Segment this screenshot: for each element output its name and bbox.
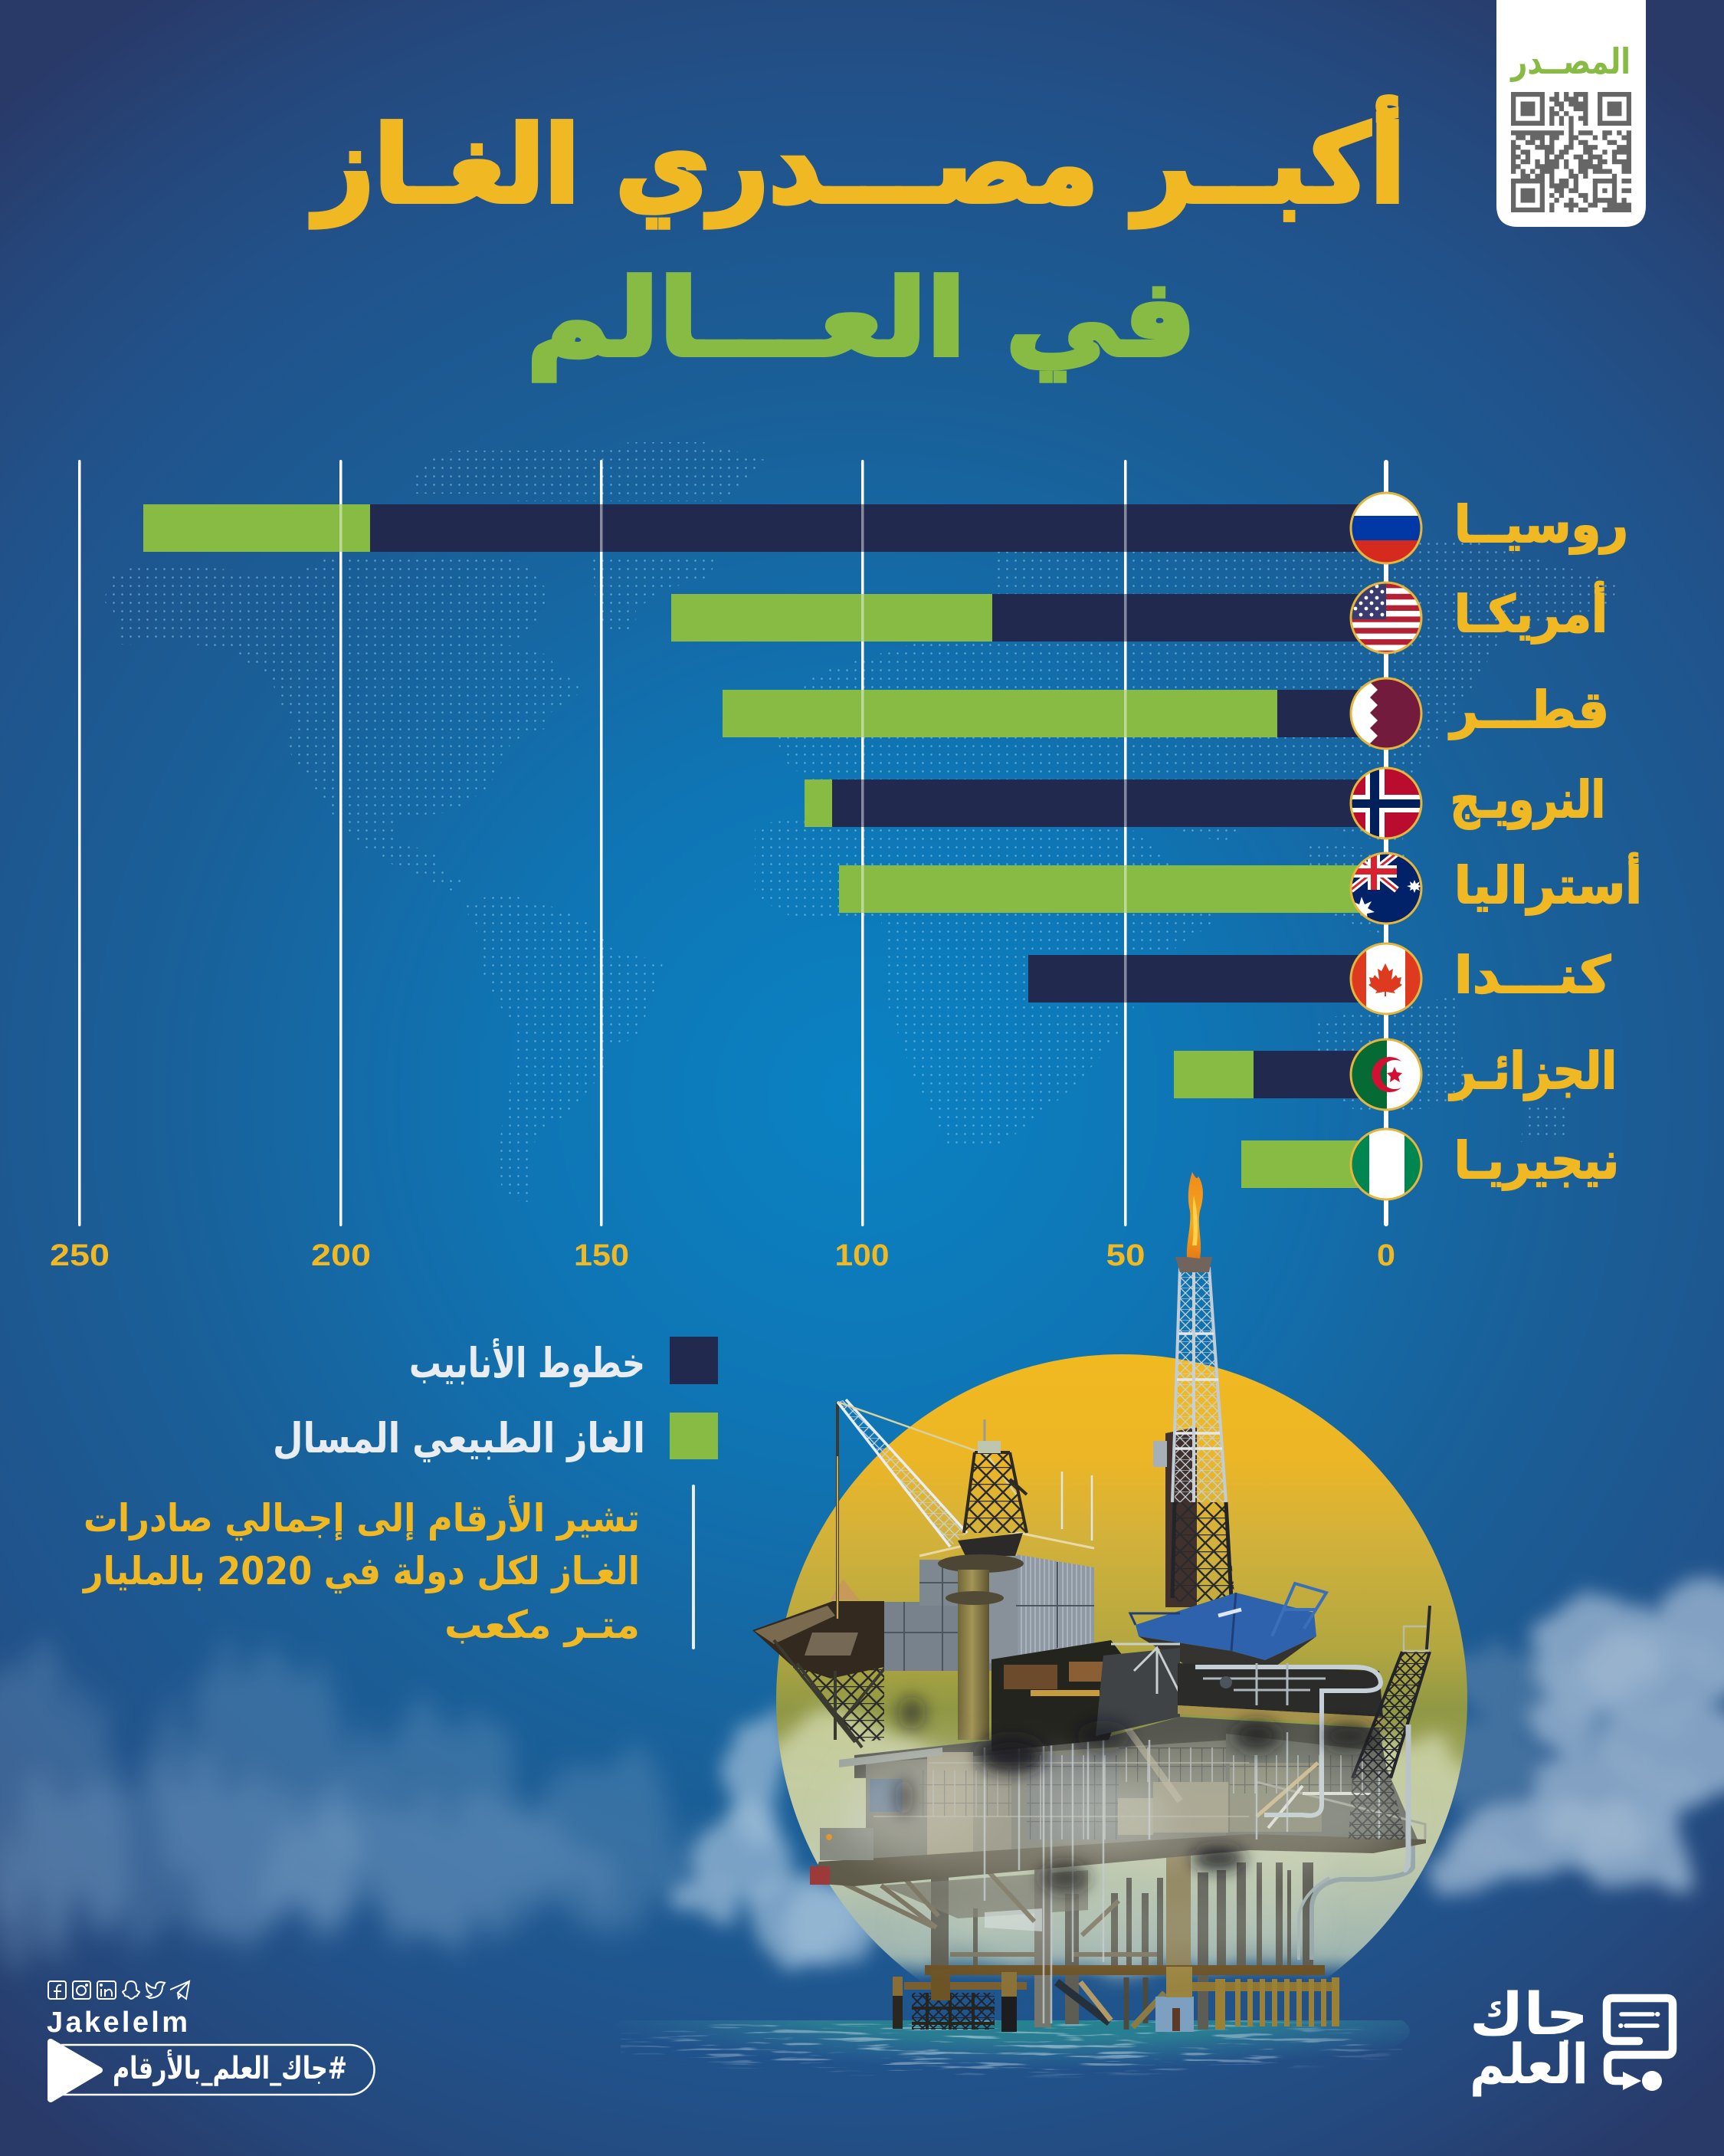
flag: Australia <box>1349 851 1425 927</box>
gridlines over bars <box>339 504 1126 1003</box>
rig: grey container modules <box>884 1472 1094 1671</box>
play icon <box>51 2042 100 2099</box>
legend: LNG label: الغاز الطبيعي المسال <box>273 1414 645 1462</box>
logo wordmark: جاك <box>1470 1980 1588 2048</box>
flag: Algeria <box>1349 1035 1425 1111</box>
country labels: قطـــر <box>1448 681 1609 740</box>
axis labels: 100 <box>835 1239 889 1272</box>
bar: Canada <box>1028 955 1364 1003</box>
note text <box>81 1485 695 1649</box>
flag: Qatar <box>1349 674 1425 751</box>
rig: legs and lower structure <box>832 1839 1413 2031</box>
bar: Norway <box>805 779 1364 827</box>
hashtag pill <box>61 2045 374 2095</box>
source label: المصــدر <box>1509 41 1631 82</box>
bar: USA <box>671 594 1364 642</box>
flag: USA <box>1349 581 1425 656</box>
country labels: النرويـج <box>1450 770 1605 830</box>
rig: crane gantry and pedestal <box>938 1419 1027 1740</box>
title line 2: في العـــالم <box>526 257 1196 381</box>
gridlines <box>78 460 1388 1226</box>
yellow circle <box>776 1354 1467 1989</box>
legend: pipelines label: خطوط الأنابيب <box>409 1338 645 1387</box>
rig: deck modules <box>810 1717 1426 2023</box>
rig: blue drill floor <box>1130 1583 1326 1675</box>
country labels: الجزائـر <box>1448 1042 1617 1101</box>
rig: left helideck <box>752 1402 889 1747</box>
brand logo: العلم <box>1470 2032 1588 2097</box>
source QR card <box>1496 0 1646 227</box>
rig: derrick tower <box>1153 1257 1235 1607</box>
axis labels: 250 <box>50 1239 110 1272</box>
country labels: نيجيريـا <box>1454 1131 1619 1190</box>
rig: gas flame <box>1187 1172 1203 1258</box>
oil rig <box>752 1172 1430 2032</box>
country labels: أمريكـا <box>1454 581 1608 644</box>
QR code <box>1511 92 1631 212</box>
flag: Canada <box>1349 943 1425 1019</box>
axis labels: 0 <box>1377 1239 1395 1272</box>
social media block <box>47 1981 374 2099</box>
country labels <box>1448 495 1642 1190</box>
brand logo <box>1470 1980 1673 2097</box>
axis labels: 50 <box>1106 1239 1145 1272</box>
axis labels: 150 <box>574 1239 629 1272</box>
handle: Jakelelm <box>47 2007 188 2039</box>
hashtag text: #جاك_العلم_بالأرقام <box>113 2049 347 2086</box>
dotted world map <box>77 429 1647 1234</box>
flag: Russia <box>1349 491 1425 565</box>
legend: LNG swatch <box>670 1413 718 1459</box>
note text: الغـاز لكل دولة في 2020 بالمليار <box>81 1549 640 1594</box>
flag: Norway <box>1349 766 1425 843</box>
note text: متـر مكعب <box>444 1603 640 1648</box>
bar: Nigeria <box>1241 1140 1364 1188</box>
axis labels: 200 <box>311 1239 371 1272</box>
sea <box>621 2020 1410 2077</box>
legend <box>273 1337 718 1462</box>
country labels: أستراليا <box>1454 852 1642 915</box>
bar: Australia <box>839 865 1364 913</box>
rig: crane boom <box>837 1400 1019 1547</box>
bar: Russia <box>143 504 1364 552</box>
note text: تشير الأرقام إلى إجمالي صادرات <box>84 1495 640 1541</box>
country labels: كنـــدا <box>1454 946 1611 1005</box>
rig: upper process decks <box>991 1640 1383 1816</box>
flag: Nigeria <box>1349 1127 1425 1203</box>
rig: right stair tower <box>1349 1606 1430 1870</box>
legend: pipelines swatch <box>670 1337 718 1384</box>
rig: fog and smoke <box>835 1696 1402 1958</box>
rig: lower walkway and fenders <box>893 1965 1339 2032</box>
bar chart <box>50 460 1395 1272</box>
clouds left <box>0 1648 881 1958</box>
axis labels <box>50 1239 1395 1272</box>
title line 1: أكبــر مصـــدري الغـاز <box>310 97 1405 228</box>
bar: Qatar <box>723 690 1364 737</box>
clouds right <box>1418 1583 1724 1893</box>
logo icon <box>1607 1998 1673 2081</box>
country labels: روسيــا <box>1454 495 1628 555</box>
social icons <box>48 1981 189 1999</box>
bar: Algeria <box>1174 1051 1364 1098</box>
